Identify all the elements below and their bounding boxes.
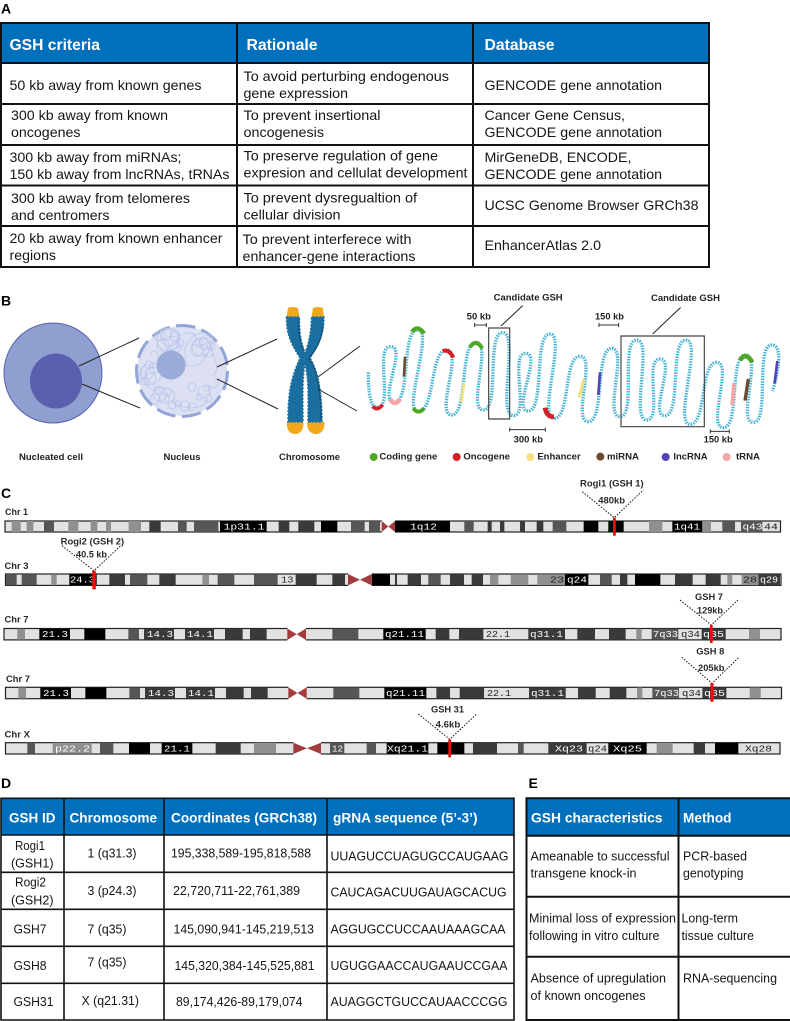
row: telomeres and centromers: and centromers: [11, 207, 109, 223]
row: GSH8: GSH8: [14, 959, 47, 973]
ideogram: chromosome X: Xq28: [745, 744, 772, 754]
ideogram: chromosome 7 with GSH 8: q31.1: [531, 689, 564, 699]
panel: GSH characteristics table: [526, 798, 790, 1020]
row: GSH8: [14, 956, 508, 973]
row: enhancers: EnhancerAtlas 2.0: [484, 237, 601, 253]
marker: Rogi2: 40.5 kb: [76, 550, 107, 560]
panel label B: B: [1, 292, 11, 308]
row: Rogi2: 22,720,711-22,761,389: [173, 884, 300, 898]
label: nucleated cell: Nucleated cell: [19, 452, 83, 462]
row: knock-in: [530, 850, 747, 880]
ideogram: chromosome 7 with GSH 8: q34: [682, 689, 701, 699]
ideogram: chromosome X: Xq21.1: [387, 744, 428, 754]
marker: Rogi2: [61, 536, 124, 589]
ideogram: chromosome 7 with GSH 8: 21.3: [43, 689, 69, 699]
ideogram: chromosome 7 with GSH 7: 7q33: [653, 630, 678, 640]
chromatin tangles: [139, 328, 218, 411]
row: telomeres and centromers: cellular division: [244, 206, 340, 222]
header labels: Database: [484, 37, 555, 54]
row: miRNAs, lncRNAs, tRNAs: [10, 148, 662, 182]
DNA strand diagram: [368, 293, 779, 461]
row: enhancers: [10, 230, 601, 264]
marker: GSH 8: GSH 8: [696, 646, 724, 656]
row: expression loss: Long-term: [682, 912, 738, 926]
telomere caps: [286, 307, 325, 434]
header labels: Chromosome: [70, 811, 157, 826]
header labels: GSH ID: [9, 811, 56, 826]
row: oncogene upregulation: RNA-sequencing: [683, 972, 777, 986]
row: oncogene upregulation: [530, 972, 777, 1003]
zoom lines: nucleus to chromosome: [217, 339, 278, 409]
header labels: Rationale: [246, 37, 318, 54]
ideogram: chromosome 7 with GSH 8: Chr 7: [6, 674, 30, 684]
ideogram: chromosome X: [4, 704, 780, 757]
panel label D: D: [1, 775, 11, 791]
marker: Rogi1: Rogi1 (GSH 1): [580, 479, 644, 489]
row: Rogi1: Rogi1: [15, 839, 45, 853]
header labels: [9, 811, 478, 826]
row: enhancers: enhancer-gene interactions: [242, 248, 416, 264]
scale brackets: 150 kb: [595, 312, 625, 322]
ideogram: chromosome 7 with GSH 8: 14.3: [148, 689, 174, 699]
row: GSH7: AGGUGCCUCCAAUAAAGCAA: [330, 922, 506, 936]
panel label C: C: [1, 485, 11, 501]
gene type legend: Oncogene: [463, 451, 510, 461]
row: 300 kb from oncogenes: Cancer Gene Census,: [484, 107, 625, 123]
nucleolus: [156, 350, 186, 380]
table header row: [1, 798, 514, 835]
ideogram: chromosome 7 with GSH 7: q21.11: [385, 630, 424, 640]
header labels: GSH criteria: [10, 37, 100, 54]
ideogram: chromosome 7 with GSH 7: 14.1: [187, 630, 213, 640]
ideogram: chromosome 1: 1q12: [410, 522, 437, 532]
row: 50 kb from genes: To avoid perturbing endogenous: [244, 68, 449, 84]
row: telomeres and centromers: UCSC Genome Browser GRCh38: [484, 197, 699, 213]
ideogram: chromosome 7 with GSH 8: q35: [704, 689, 725, 699]
scale brackets: 300 kb: [514, 435, 544, 445]
row: knock-in: genotyping: [683, 866, 744, 880]
row: telomeres and centromers: 300 kb away from telomeres: [11, 190, 190, 206]
marker: Rogi1: 480kb: [598, 495, 626, 505]
row: enhancers: To prevent interferece with: [242, 231, 412, 247]
header labels: [531, 811, 732, 826]
marker: GSH 31: 4.6kb: [436, 719, 461, 729]
gene type legend: Coding gene: [379, 451, 437, 461]
ideogram: chromosome 3: 13: [281, 576, 294, 586]
panel: GSH sites table: [1, 798, 514, 1020]
ideogram: chromosome 1: 1p31.1: [224, 522, 264, 532]
ideogram: chromosome 1: 1q41: [674, 522, 700, 532]
marker: GSH 8: 205kb: [698, 663, 725, 673]
ideogram: chromosome 7 with GSH 7: 22.1: [486, 630, 510, 640]
ideogram: chromosome 7 with GSH 7: Chr 7: [4, 614, 29, 624]
strand: [368, 330, 779, 428]
row: 300 kb from oncogenes: To prevent insertional: [244, 107, 380, 123]
gene type legend: [370, 451, 761, 461]
zoom lines: chromosome to DNA: [318, 346, 360, 411]
ideogram: chromosome 7 with GSH 8: 22.1: [487, 689, 511, 699]
row: Rogi2: [11, 876, 506, 907]
gene segments: [373, 328, 777, 417]
marker: GSH 7: GSH 7: [695, 592, 723, 602]
row: miRNAs, lncRNAs, tRNAs: To preserve regulation of gene: [244, 148, 438, 164]
row: Rogi1: UUAGUCCUAGUGCCAUGAAG: [330, 850, 508, 864]
ideogram: chromosome X: Chr X: [4, 729, 30, 739]
table header row: [526, 798, 790, 836]
ideogram: chromosome 7 with GSH 7: [4, 592, 781, 643]
row: GSH7: 7 (q35): [88, 922, 126, 936]
row: Rogi2: (GSH2): [11, 893, 54, 907]
row: Rogi2: CAUCAGACUUGAUAGCACUG: [330, 886, 506, 900]
row: enhancers: regions: [10, 247, 56, 263]
row: GSH31: AUAGGCTGUCCAUAACCCGG: [330, 995, 508, 1009]
row: GSH31: X (q21.31): [82, 994, 139, 1008]
gene type legend: tRNA: [736, 451, 761, 461]
row: enhancers: 20 kb away from known enhancer: [10, 230, 223, 246]
row: Rogi2: Rogi2: [15, 876, 46, 890]
row: GSH7: [14, 922, 506, 936]
marker: GSH 7: [680, 592, 738, 643]
candidate GSH labels: Candidate GSH: [651, 293, 720, 303]
row: miRNAs, lncRNAs, tRNAs: 300 kb away from miRNAs;: [10, 149, 181, 165]
ideogram: chromosome 3: 28: [743, 576, 757, 586]
row: expression loss: tissue culture: [682, 929, 754, 943]
header labels: gRNA sequence (5’-3’): [333, 811, 478, 826]
candidate GSH labels: Candidate GSH: [494, 293, 563, 303]
panel label E: E: [528, 775, 538, 791]
row: 50 kb from genes: [10, 68, 662, 101]
row: 300 kb from oncogenes: oncogenesis: [244, 124, 324, 140]
row: miRNAs, lncRNAs, tRNAs: 150 kb away from lncRNAs, tRNAs: [10, 166, 230, 182]
ideogram: chromosome X: Xq25: [613, 744, 642, 754]
ideogram: chromosome 1: [5, 479, 780, 536]
header labels: GSH characteristics: [531, 811, 662, 826]
ideogram: chromosome X: 12: [332, 744, 343, 754]
gene type legend: Enhancer: [537, 451, 581, 461]
row: expression loss: following in vitro culture: [529, 929, 660, 943]
row: miRNAs, lncRNAs, tRNAs: expresion and cellulat development: [244, 164, 468, 180]
ideogram: chromosome 3: q29: [760, 576, 778, 586]
ideogram: chromosome 1: 44: [764, 522, 778, 532]
ideogram: chromosome 1: Chr 1: [5, 507, 28, 517]
ideogram: chromosome 7 with GSH 7: 14.3: [147, 630, 173, 640]
row: 300 kb from oncogenes: [11, 107, 662, 140]
panel: GSH criteria table: [1, 23, 709, 267]
table header row: [1, 23, 709, 63]
row: expression loss: Minimal loss of expression: [529, 912, 676, 926]
row: knock-in: transgene knock-in: [530, 866, 636, 880]
row: knock-in: PCR-based: [683, 850, 747, 864]
gene type legend: miRNA: [607, 451, 640, 461]
gene type legend: lncRNA: [673, 451, 708, 461]
row: Rogi1: (GSH1): [11, 857, 54, 871]
row: 300 kb from oncogenes: 300 kb away from known: [11, 107, 168, 123]
row: Rogi1: [11, 839, 508, 871]
header labels: Coordinates (GRCh38): [171, 811, 317, 826]
row: oncogene upregulation: of known oncogenes: [530, 989, 646, 1003]
scale brackets: 50 kb: [467, 312, 492, 322]
ideogram: chromosome 7 with GSH 7: 21.3: [42, 630, 68, 640]
ideogram: chromosome 7 with GSH 7: q34: [681, 630, 700, 640]
ideogram: chromosome 7 with GSH 8: q21.11: [386, 689, 425, 699]
marker: Rogi2: Rogi2 (GSH 2): [61, 536, 124, 546]
row: 50 kb from genes: 50 kb away from known genes: [10, 77, 202, 93]
row: telomeres and centromers: To prevent dysregualtion of: [244, 190, 417, 206]
ideogram: chromosome 3: [4, 536, 781, 589]
row: Rogi2: 3 (p24.3): [88, 884, 136, 898]
candidate GSH boxes: [489, 328, 704, 427]
row: 300 kb from oncogenes: GENCODE gene annotation: [484, 124, 662, 140]
row: knock-in: Ameanable to successful: [530, 850, 670, 864]
ideogram: chromosome 7 with GSH 7: q31.1: [530, 630, 563, 640]
row: GSH31: 89,174,426-89,179,074: [176, 995, 303, 1009]
row: GSH8: UGUGGAACCAUGAAUCCGAA: [330, 959, 508, 973]
ideogram: chromosome X: q24: [588, 744, 607, 754]
candidate GSH labels: [494, 293, 720, 334]
ideogram: chromosome 1: q43: [742, 522, 762, 532]
marker: Rogi1: [580, 479, 644, 536]
zoom lines: cell to nucleus: [79, 338, 140, 408]
header labels: [10, 37, 555, 54]
row: Rogi1: 195,338,589-195,818,588: [171, 847, 311, 861]
header labels: Method: [683, 811, 732, 826]
row: 50 kb from genes: GENCODE gene annotation: [484, 77, 662, 93]
label: chromosome: Chromosome: [279, 452, 340, 462]
row: miRNAs, lncRNAs, tRNAs: GENCODE gene annotation: [484, 166, 662, 182]
icon: nucleated cell: [4, 323, 102, 423]
icon: chromosome: [286, 307, 325, 434]
ideogram: chromosome 3: 23: [550, 576, 564, 586]
ideogram: chromosome X: 21.1: [164, 744, 190, 754]
marker: GSH 31: GSH 31: [431, 704, 464, 714]
row: oncogene upregulation: Absence of upregulation: [530, 972, 666, 986]
row: 300 kb from oncogenes: oncogenes: [11, 124, 80, 140]
ideogram: chromosome 3: Chr 3: [4, 561, 29, 571]
ideogram: chromosome 3: q24: [567, 576, 587, 586]
row: telomeres and centromers: [11, 190, 699, 223]
chromatids: [286, 317, 324, 422]
ideogram: chromosome X: p22.2: [55, 744, 90, 754]
ideogram: chromosome 7 with GSH 8: 7q33: [654, 689, 679, 699]
row: 50 kb from genes: gene expression: [244, 85, 348, 101]
ideogram: chromosome 7 with GSH 7: q35: [703, 630, 724, 640]
row: GSH31: [14, 994, 508, 1009]
row: miRNAs, lncRNAs, tRNAs: MirGeneDB, ENCODE,: [484, 149, 632, 165]
label: nucleus: Nucleus: [164, 452, 200, 462]
row: Rogi1: 1 (q31.3): [88, 847, 136, 861]
marker: GSH 7: 129kb: [697, 606, 723, 616]
row: GSH7: 145,090,941-145,219,513: [174, 922, 314, 936]
row: GSH31: GSH31: [14, 995, 54, 1009]
ideogram: chromosome 7 with GSH 8: 14.1: [188, 689, 214, 699]
panel label A: A: [1, 0, 11, 16]
ideogram: chromosome 7 with GSH 8: [6, 646, 782, 702]
scale brackets: 150 kb: [704, 435, 733, 445]
scale brackets: [467, 312, 733, 445]
row: GSH7: GSH7: [14, 922, 47, 936]
row: GSH8: 7 (q35): [88, 956, 126, 970]
ideogram: chromosome X: Xq23: [555, 744, 583, 754]
marker: GSH 8: [682, 646, 739, 702]
ideogram: chromosome 3: 24.3: [70, 576, 95, 586]
icon: nucleus: [136, 326, 228, 416]
marker: GSH 31: [418, 704, 477, 757]
row: expression loss: [529, 912, 754, 943]
row: GSH8: 145,320,384-145,525,881: [174, 959, 315, 973]
